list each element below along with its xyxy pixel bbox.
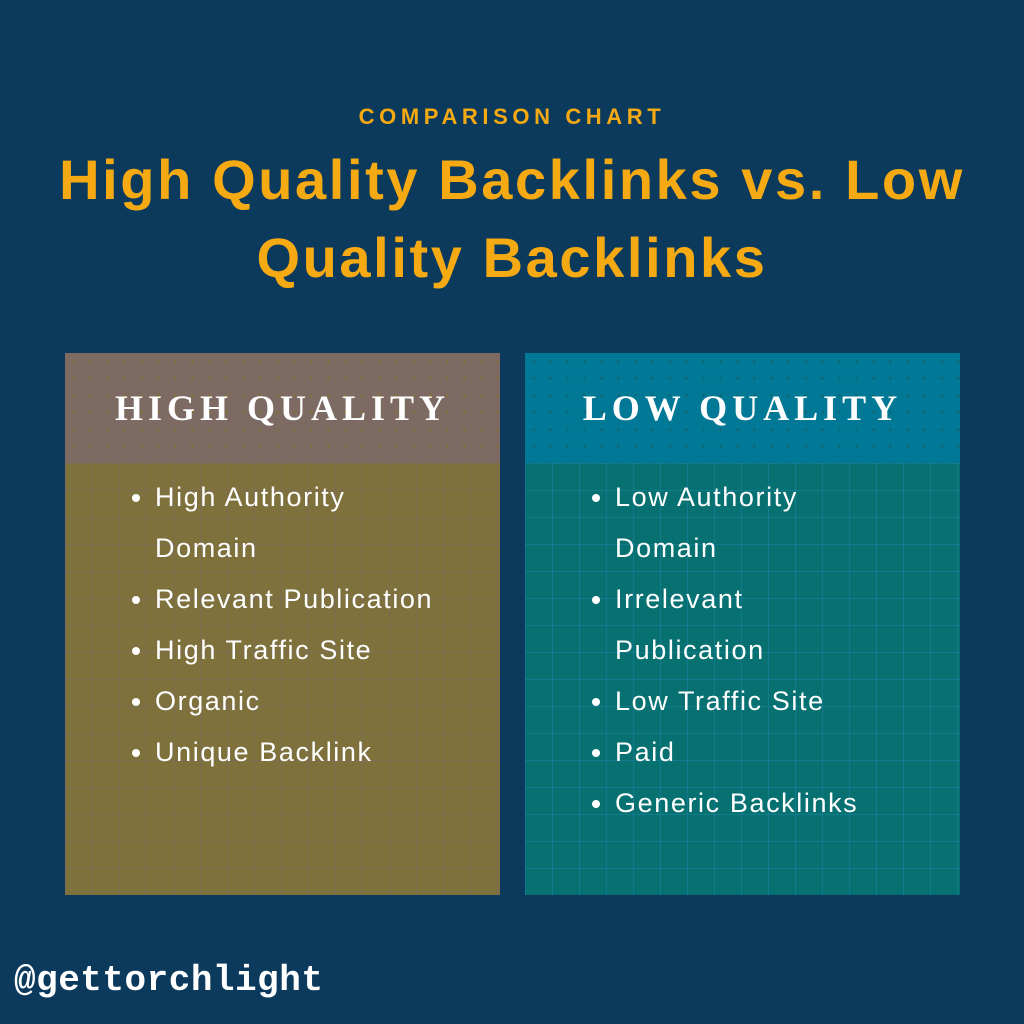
panel: low quality (525, 353, 960, 895)
list: high quality: Unique Backlink (155, 737, 373, 767)
list: high quality (65, 463, 500, 895)
list: high quality: Domain (155, 533, 258, 563)
list: high quality: Relevant Publication (155, 584, 433, 614)
list: low quality: Low Traffic Site (615, 686, 825, 716)
list: low quality: Domain (615, 533, 718, 563)
heading: low quality (525, 353, 960, 463)
title (59, 148, 965, 289)
title: High Quality Backlinks vs. Low (59, 148, 965, 211)
list: low quality: Low Authority (615, 482, 798, 512)
list: low quality: Irrelevant (615, 584, 744, 614)
list: high quality: High Traffic Site (155, 635, 372, 665)
subtitle: COMPARISON CHART (359, 104, 665, 129)
heading: high quality: HIGH QUALITY (115, 388, 450, 428)
title: Quality Backlinks (256, 226, 768, 289)
heading: high quality (65, 353, 500, 463)
list: high quality: Organic (155, 686, 261, 716)
handle: @gettorchlight (14, 960, 323, 1001)
list: high quality: High Authority (155, 482, 346, 512)
list: low quality: Publication (615, 635, 765, 665)
list: low quality: Generic Backlinks (615, 788, 858, 818)
panel: high quality (65, 353, 500, 895)
list: low quality: Paid (615, 737, 675, 767)
heading: low quality: LOW QUALITY (583, 388, 902, 428)
list: low quality (525, 463, 960, 895)
